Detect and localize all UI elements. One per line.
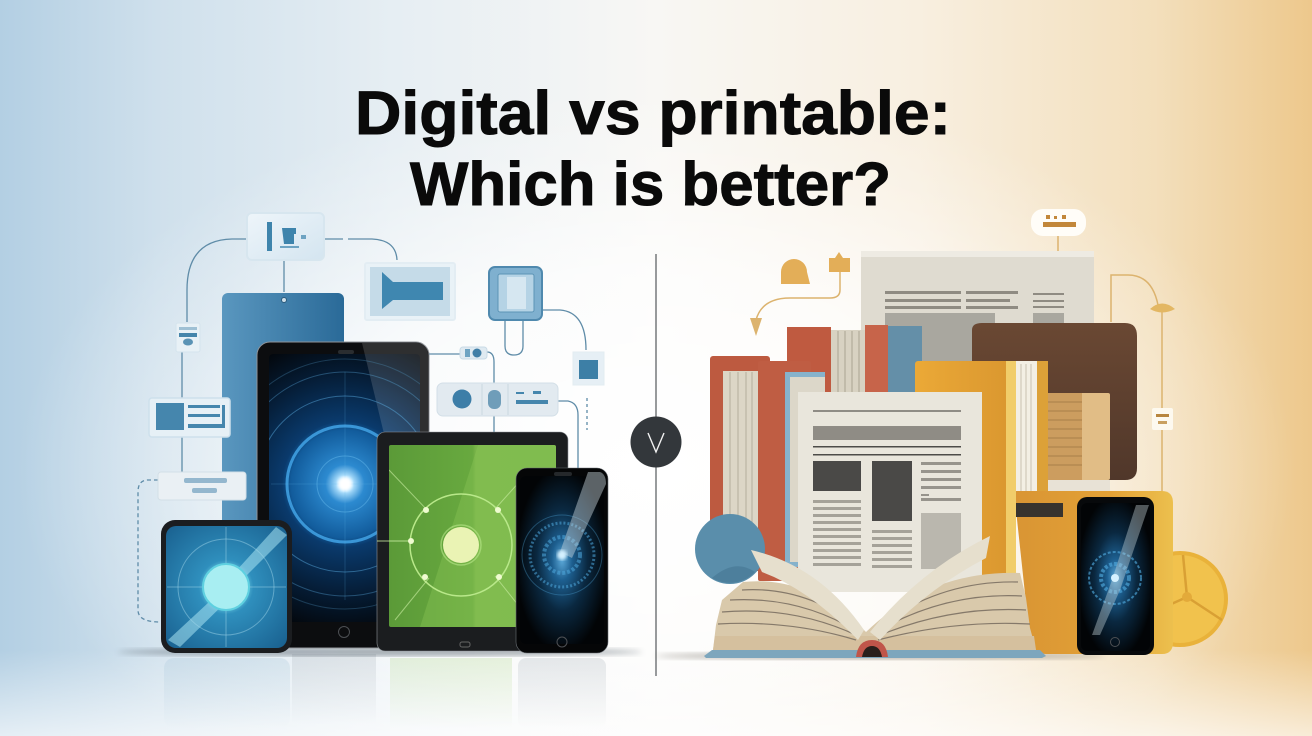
device: phone in case: [1077, 497, 1154, 655]
icon: golden coin: [1132, 551, 1228, 647]
title: Digital vs printable:: [355, 79, 951, 147]
icon: small square card: [573, 352, 604, 385]
icon: note left: [176, 323, 200, 352]
device: green tablet: [377, 432, 568, 651]
floor reflections of devices: [164, 654, 606, 728]
centre divider: [630, 254, 682, 676]
icon: text card: [149, 398, 230, 437]
title: Which is better?: [410, 150, 891, 218]
icon: button bar: [158, 472, 246, 500]
connector lines: [138, 239, 587, 622]
newspaper back: [861, 251, 1094, 376]
icon: device module: [489, 267, 542, 320]
panel: digital devices: [118, 213, 642, 728]
icon: pin tag: [829, 252, 850, 272]
icon: control bar: [437, 383, 558, 416]
icon: small note: [1152, 408, 1173, 430]
book: wooden block: [1048, 393, 1110, 492]
icon: down arrow: [750, 318, 762, 336]
icon: interface card top: [247, 213, 324, 260]
connector lines: [756, 236, 1162, 491]
book: left red stack: [710, 356, 825, 581]
book: open book: [704, 536, 1046, 658]
icon: blue sphere: [695, 514, 765, 584]
icon: label badge: [1031, 209, 1086, 236]
book: brown leather: [972, 323, 1137, 480]
panel: printed materials: [655, 209, 1228, 660]
icon: video window: [365, 263, 455, 320]
icon: lamp disc: [1150, 304, 1175, 312]
device: smartphone: [516, 468, 608, 653]
document: newspaper front: [798, 392, 982, 592]
book: orange phone case: [1016, 491, 1173, 654]
device: small square tablet: [161, 520, 292, 653]
title: [355, 79, 951, 218]
icon: control pill: [460, 347, 487, 359]
versus badge: [630, 416, 682, 468]
book: red back books: [787, 325, 922, 407]
icon: helmet: [781, 259, 810, 284]
book: orange tall: [915, 361, 1048, 583]
device: large dark tablet: [256, 342, 430, 648]
device: blue back tablet: [222, 293, 344, 528]
